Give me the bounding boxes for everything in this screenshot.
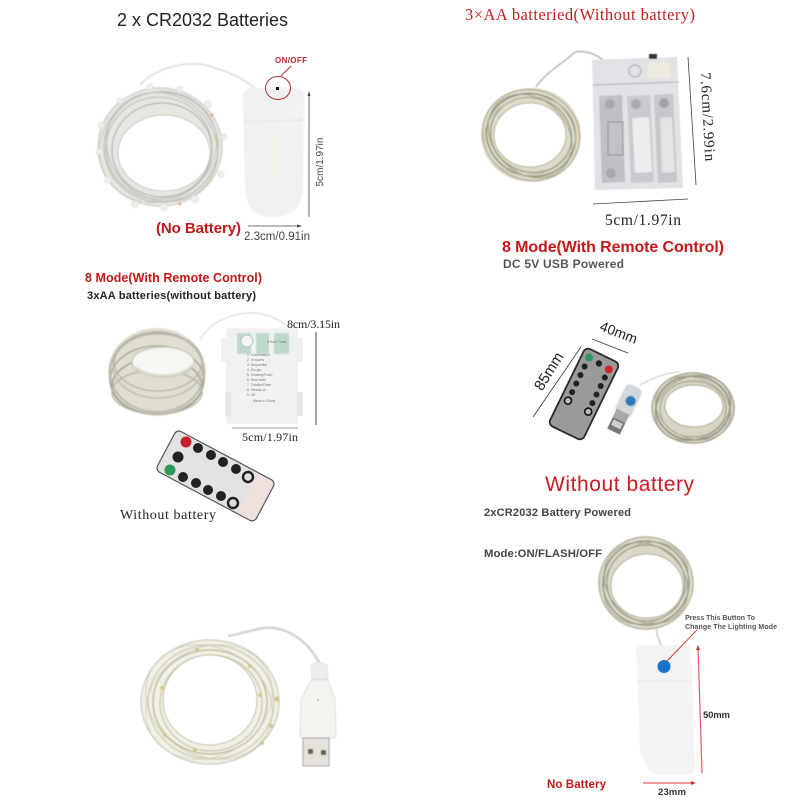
note: no battery: No Battery: [547, 779, 607, 791]
dimension: 7.6cm/2.99in: [688, 57, 717, 185]
text: 3xAA batteries: 3xAA batteries(without battery): [87, 290, 256, 302]
note: no battery: (No Battery): [156, 220, 241, 237]
panel: 3xAA battery box: [465, 5, 724, 271]
panel: USB remote set: [531, 318, 741, 496]
text: without battery: Without battery: [120, 508, 216, 523]
icon: battery box with instructions: 6. Slow fade: [247, 378, 266, 382]
icon: battery box with instructions: 3. Sequential: [247, 363, 267, 367]
icon: battery box with instructions: 5. Chasing/Flash: [247, 373, 273, 377]
icon: silver wire coil: [108, 328, 206, 416]
icon: remote control, dark: [548, 347, 620, 441]
icon: battery box with instructions: 4. Slo-glo: [247, 368, 261, 372]
text: DC 5V USB Powered: DC 5V USB Powered: [503, 257, 624, 271]
heading: 3xAA batteried: 3×AA batteried(Without battery): [465, 5, 695, 24]
icon: silver wire coil: [587, 525, 705, 641]
icon: battery box with instructions: 1. Combination: [247, 353, 270, 357]
icon: battery box with instructions: 7. Twinkle/Flash: [247, 383, 271, 387]
icon: 3xAA battery box: [592, 54, 683, 190]
icon: silver wire light coil: [79, 70, 240, 224]
panel: 8 mode remote with 3xAA batteries: [85, 271, 340, 523]
icon: USB plug: [300, 662, 336, 766]
dimension: height: [308, 91, 326, 217]
heading: 2 x CR2032 Batteries: 2 x CR2032 Batteries: [117, 10, 288, 30]
text: mode: Mode:ON/FLASH/OFF: [484, 548, 602, 560]
callout: on/off button: ON/OFF: [275, 56, 307, 65]
dimension: width: [244, 224, 310, 243]
heading: without battery: Without battery: [545, 473, 694, 496]
panel: 2 x CR2032 batteries: [79, 10, 326, 243]
icon: battery box with instructions: 8 Hour Timer: [267, 340, 287, 344]
dimension: 8cm/3.15in: [287, 317, 340, 425]
icon: battery box with instructions: [221, 328, 303, 424]
dimension: height: 5cm/1.97in: [315, 138, 326, 186]
dimension: 40mm: 40mm: [598, 318, 640, 347]
panel: USB plug light string: [125, 622, 336, 782]
wire to battery box: [536, 51, 605, 87]
callout: press this button: [658, 615, 777, 673]
icon: battery box with instructions: Made in China: [253, 399, 275, 403]
heading: 8 Mode: 8 Mode(With Remote Control): [85, 271, 262, 285]
icon: USB controller dongle: [605, 372, 680, 436]
text: 2xCR2032 Battery Powered: 2xCR2032 Battery Powered: [484, 507, 631, 519]
dimension: 85mm: [531, 347, 581, 417]
icon: coin battery case: [243, 88, 304, 217]
wire: [657, 628, 661, 646]
dimension: 23mm: [643, 781, 696, 798]
wire to USB plug: [228, 628, 320, 664]
heading: 8 Mode with remote control: 8 Mode(With Remote Control): [502, 239, 724, 256]
dimension: 85mm: 85mm: [531, 349, 567, 394]
dimension: 8cm/3.15in: 8cm/3.15in: [287, 317, 340, 331]
icon: silver wire coil: [470, 76, 592, 195]
icon: silver wire coil: [645, 363, 741, 453]
icon: remote control: [155, 429, 276, 523]
dimension: 50mm: [696, 645, 730, 773]
dimension: 50mm: 50mm: [703, 710, 730, 721]
dimension: 7.6cm/2.99in: 7.6cm/2.99in: [697, 72, 717, 162]
dimension: 5cm/1.97in: 5cm/1.97in: [242, 430, 298, 444]
callout: press this button: Press This Button To: [685, 615, 755, 622]
callout: on/off button: [266, 56, 307, 100]
dimension: 5cm/1.97in: 5cm/1.97in: [605, 212, 681, 229]
wire to battery case: [140, 64, 257, 90]
dimension: width: 2.3cm/0.91in: [244, 231, 310, 243]
icon: coin battery case: [636, 645, 695, 775]
panel: 2xCR2032 battery powered: [484, 507, 777, 798]
icon: silver wire coil: [125, 622, 293, 782]
icon: battery box with instructions: 9. Off: [247, 393, 255, 397]
icon: battery box with instructions: 8. Steady on: [247, 388, 266, 392]
wire to box: [200, 313, 285, 340]
callout: press this button: Change The Lighting Mode: [685, 624, 777, 631]
icon: battery box with instructions: 2. In waves: [247, 358, 264, 362]
dimension: 5cm/1.97in: [593, 199, 688, 229]
dimension: 23mm: 23mm: [658, 787, 686, 798]
